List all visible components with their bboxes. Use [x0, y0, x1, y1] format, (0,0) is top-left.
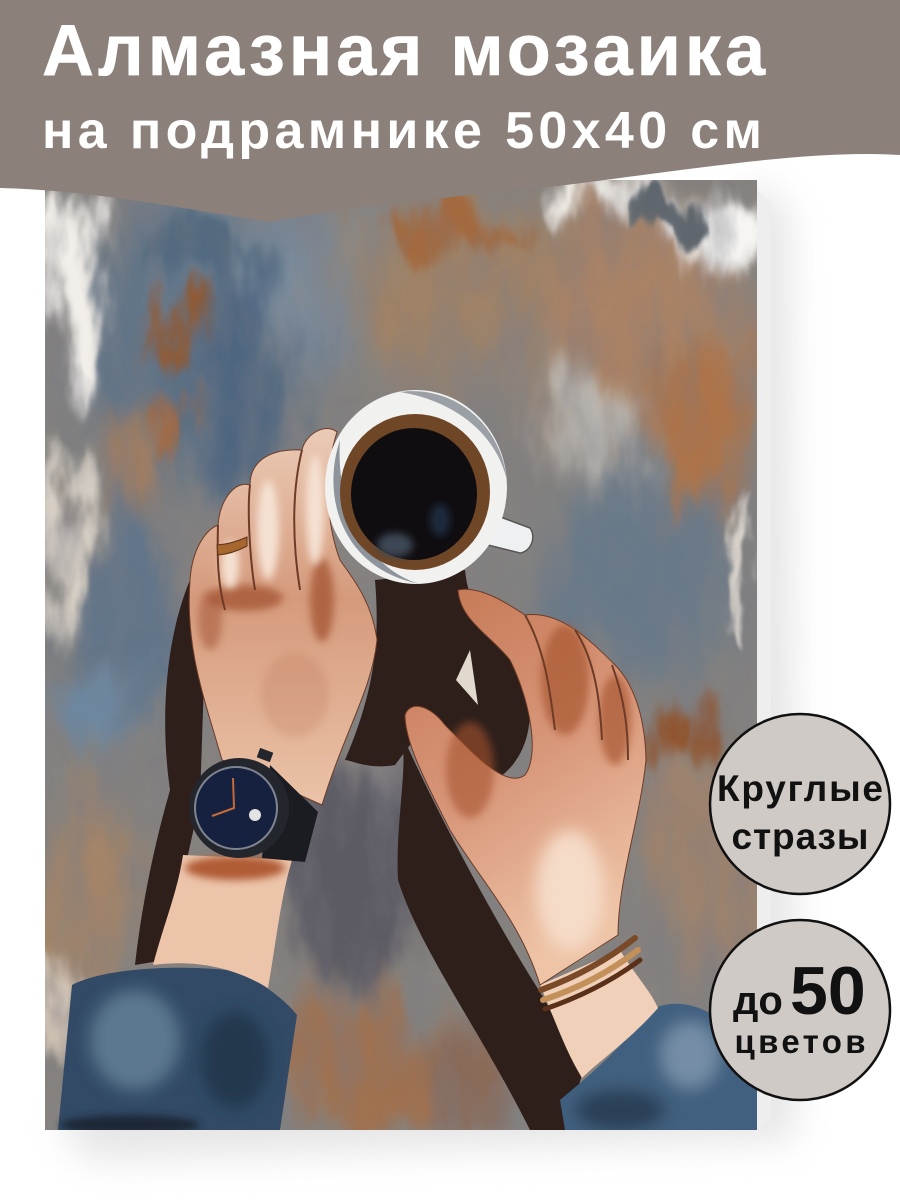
left sleeve folds	[60, 990, 269, 1135]
badge: round rhinestones: Круглые	[717, 768, 883, 809]
badge: round rhinestones: стразы	[732, 816, 868, 857]
right finger lines	[525, 615, 628, 760]
finger highlights	[221, 455, 324, 589]
right hand highlight	[536, 830, 604, 950]
paint wash background	[40, 177, 775, 1140]
ring	[217, 537, 247, 555]
title: Алмазная мозаика	[42, 11, 766, 91]
canvas drop shadow	[60, 180, 795, 1160]
coffee cup	[325, 390, 533, 584]
top banner	[0, 0, 900, 222]
right sleeve	[560, 1004, 757, 1130]
subtitle: на подрамнике 50х40 см	[42, 102, 762, 160]
right hand knuckle shading	[446, 625, 631, 818]
watch	[189, 748, 318, 862]
paint texture	[45, 180, 757, 1130]
watercolor painting canvas	[40, 177, 775, 1140]
left forearm shading	[185, 856, 285, 880]
right sleeve highlights	[575, 1021, 720, 1130]
right hand	[405, 589, 646, 985]
dark cast shadow of the hands	[135, 570, 582, 1130]
badge: up to 50 colours	[710, 920, 890, 1100]
badge: up to 50 colours: цветов	[734, 1023, 866, 1060]
knuckle shading	[198, 558, 334, 737]
right forearm	[540, 950, 658, 1078]
left forearm	[153, 855, 292, 988]
badge: up to 50 colours: 50	[790, 953, 866, 1029]
badge: up to 50 colours: до	[733, 979, 783, 1023]
badge: round rhinestones	[710, 714, 890, 894]
left sleeve	[58, 968, 297, 1130]
bracelet	[541, 938, 640, 1009]
left hand	[189, 428, 377, 805]
finger separators	[218, 450, 302, 610]
light gap in shadow	[456, 650, 478, 705]
